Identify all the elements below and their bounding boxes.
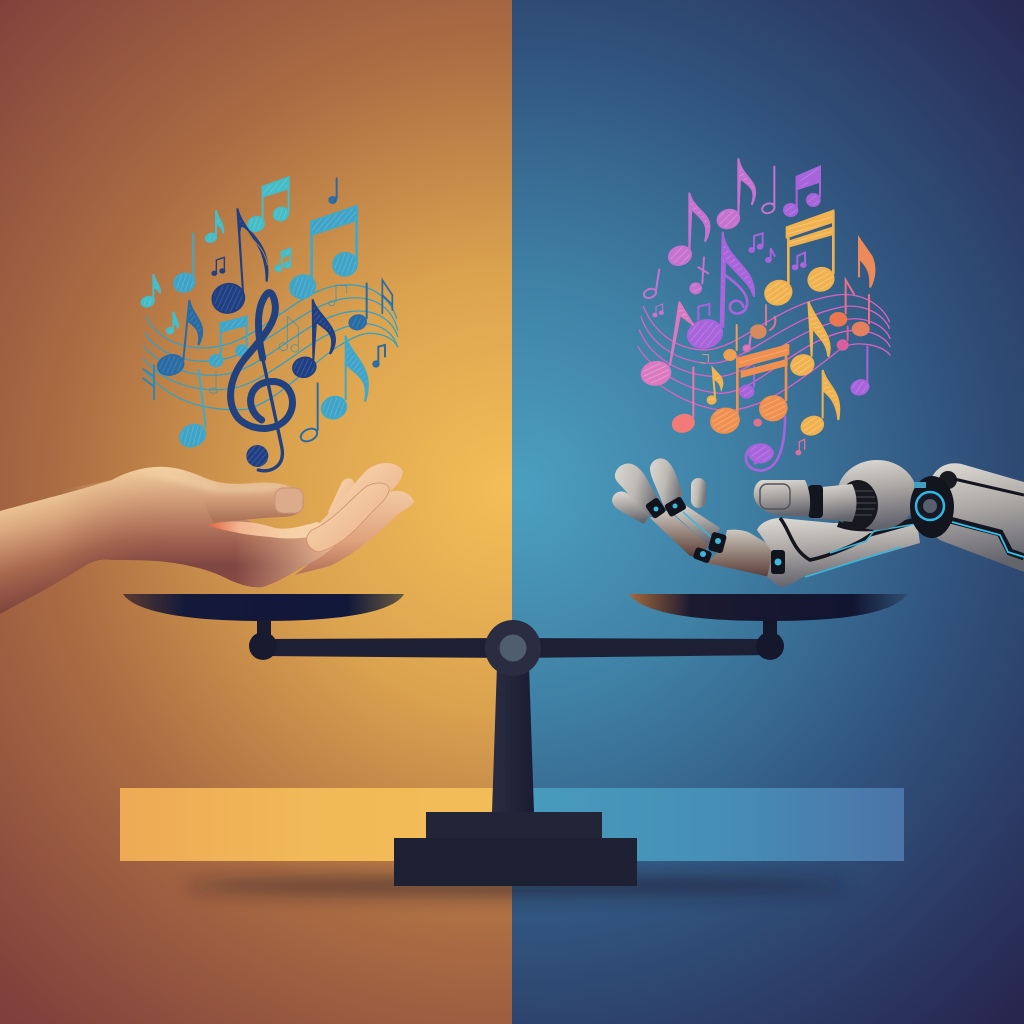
music cluster: robot, purple, pink and orange notes: [638, 158, 890, 471]
large shoulder sphere: [837, 460, 917, 530]
upper fingertip: [650, 458, 683, 509]
lower proximal finger: [650, 510, 708, 558]
palm and forearm: [757, 518, 920, 587]
upper base step: [426, 812, 602, 838]
thumb highlight: [140, 473, 290, 493]
notes: mid blue-teal: [143, 206, 368, 451]
small thumb-side finger: [691, 478, 706, 508]
right pan: [629, 594, 908, 621]
thumbnail: [275, 488, 303, 513]
beam: [263, 638, 770, 658]
left fingertip: [615, 463, 659, 516]
right base bar: [533, 788, 904, 861]
left base bar: [120, 788, 493, 861]
forearm shell inner shadow: [939, 471, 957, 489]
palm shading: [75, 466, 331, 588]
front finger: [307, 483, 389, 552]
human hand: [0, 463, 414, 614]
treble clef: [231, 293, 292, 471]
palm dark contour: [780, 518, 917, 560]
upper forearm shell: [927, 463, 1024, 572]
dark shoulder opening: [838, 480, 878, 530]
notes: light teal: [140, 177, 290, 333]
notes: deep blue: [156, 178, 392, 444]
finger joints: [645, 496, 785, 574]
forearm cyan line: [952, 522, 1024, 557]
notes: orchid pink: [643, 158, 776, 316]
wrist joint: [910, 476, 954, 538]
forearm cyan lines: [805, 524, 916, 577]
forearm lower channel: [950, 520, 1024, 557]
back finger: [328, 478, 354, 522]
pivot hub: [485, 620, 541, 676]
ground shadow: [185, 875, 845, 897]
background: cool right half: [512, 0, 1024, 1024]
music cluster: human, teal and navy hand-drawn notes: [140, 177, 398, 471]
notes: navy: [209, 208, 335, 380]
staff lines: [143, 285, 398, 410]
thumb: [203, 478, 304, 523]
rear fingertip: [612, 492, 652, 524]
staff lines: [638, 295, 890, 410]
palm glow: [207, 521, 336, 539]
left hanger: [257, 620, 271, 640]
robot hand and arm: [612, 458, 1024, 587]
thumb nail plate: [760, 484, 790, 509]
arm and palm body: [0, 467, 350, 614]
lower base step: [394, 838, 637, 886]
upper proximal finger: [675, 503, 720, 547]
lower outer finger: [295, 491, 414, 575]
left pan: [123, 594, 404, 621]
thumb joint: [808, 485, 823, 518]
joint cyan dots: [654, 504, 782, 566]
palm light: [242, 534, 336, 587]
notes: gold: [708, 211, 839, 438]
middle hand segment: [707, 530, 773, 577]
upper finger: [316, 463, 403, 534]
right beam end: [756, 632, 784, 660]
forearm dark stripe: [954, 479, 1024, 495]
left beam end: [249, 632, 277, 660]
balance scale: [123, 594, 908, 886]
cyan finger line: [683, 512, 770, 557]
background: warm left half: [0, 0, 512, 1024]
right hanger: [763, 620, 777, 640]
dark band below shoulder: [838, 520, 917, 528]
thumb tip: [754, 480, 810, 517]
notes: pink and coral: [640, 302, 848, 454]
notes: orange and red: [671, 238, 874, 436]
support post: [492, 665, 534, 812]
thumb cylinder: [812, 484, 856, 522]
notes: faint background: [209, 285, 347, 393]
shoulder ribs: [855, 491, 876, 515]
notes: violet: [685, 167, 871, 471]
